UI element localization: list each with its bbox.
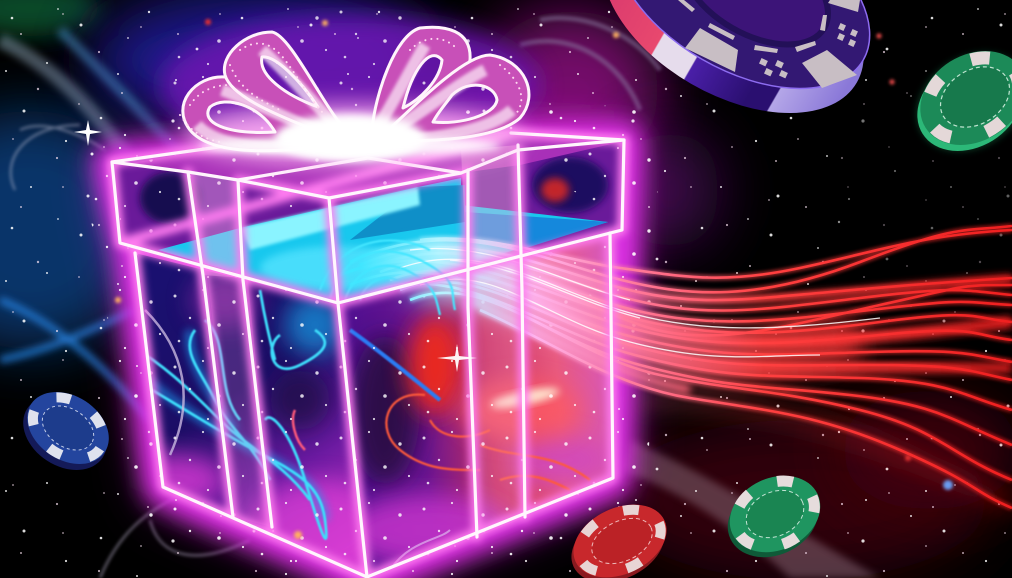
left panel of box	[137, 254, 362, 563]
lid ribbon bands	[188, 145, 520, 290]
red chip bottom	[560, 490, 678, 578]
white neon outline of box	[112, 133, 624, 577]
light streams flowing out of the box	[320, 226, 1012, 508]
bow speckles	[180, 39, 521, 142]
lid of gift box	[112, 133, 624, 303]
ribbon bow	[180, 27, 529, 165]
bow loops	[183, 27, 529, 151]
gift box body	[137, 237, 611, 574]
bow glow	[182, 105, 522, 165]
magenta halo around gift box	[112, 15, 624, 577]
stars inside the gift box	[136, 254, 358, 556]
stars inside the gift box right side	[344, 246, 606, 574]
sparkles and bright foreground stars	[74, 19, 953, 539]
right panel of box	[338, 233, 613, 577]
bow knot light	[275, 114, 425, 162]
lid inner cavity in cyan	[112, 133, 624, 303]
big purple casino chip	[567, 0, 903, 155]
green chip top right	[899, 32, 1012, 170]
body ribbon bands	[203, 200, 525, 537]
blue chip left	[9, 377, 122, 485]
bow translucent white sheen	[197, 45, 512, 147]
green chip bottom	[715, 462, 833, 571]
